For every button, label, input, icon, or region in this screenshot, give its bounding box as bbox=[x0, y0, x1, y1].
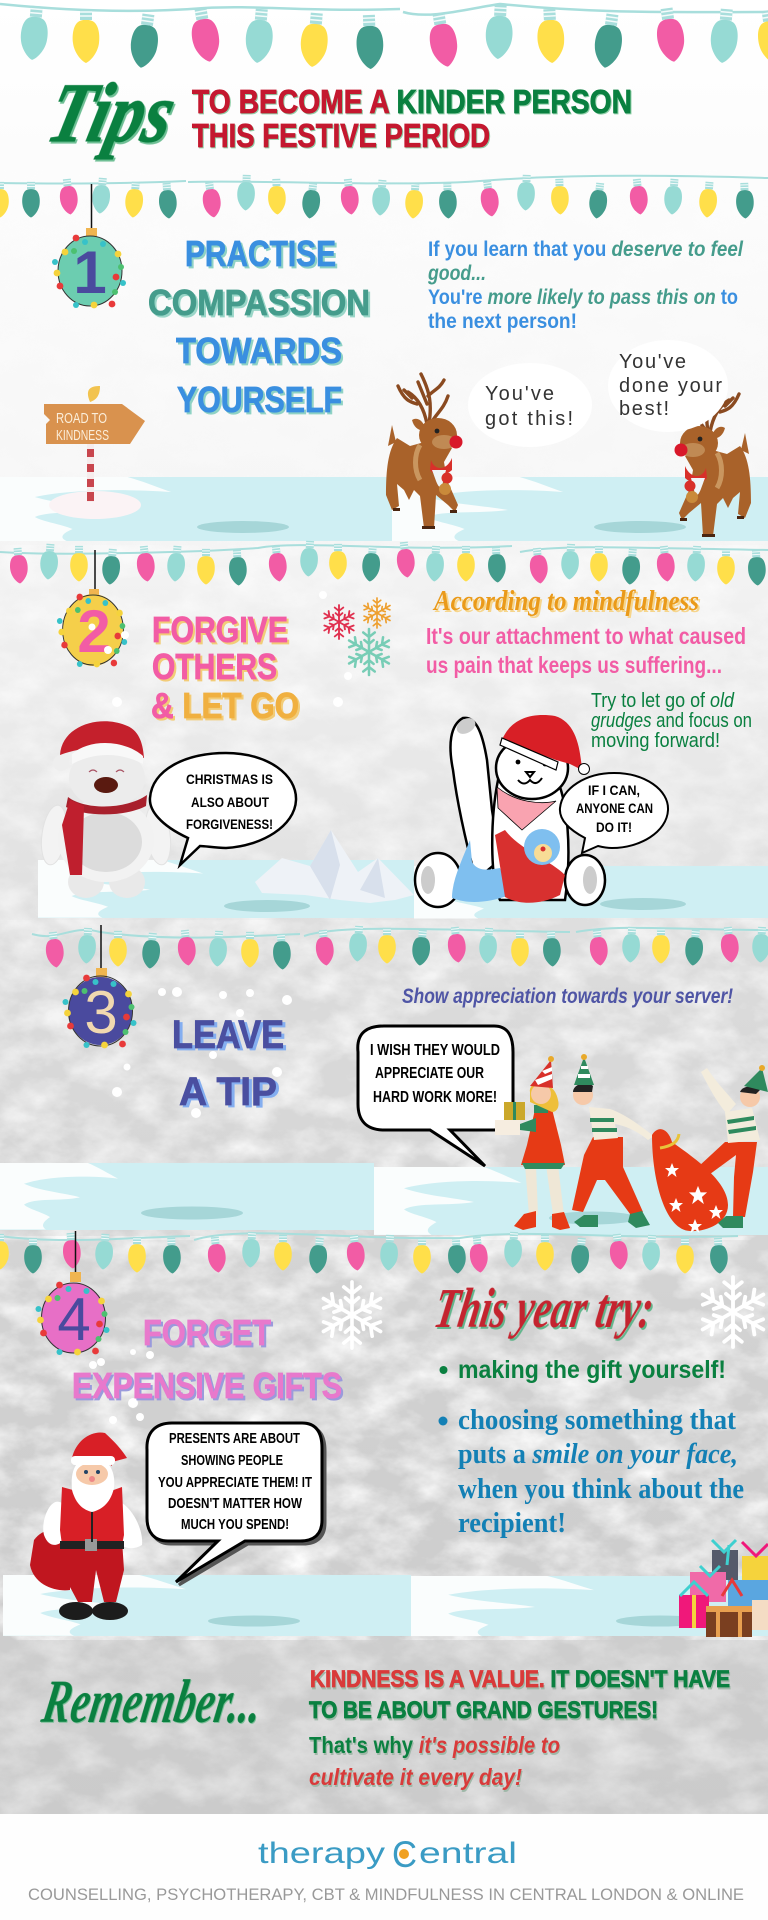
bubble text: IF I CAN, bbox=[588, 782, 640, 798]
elf carrying gifts bbox=[495, 1056, 570, 1230]
santa bbox=[30, 1432, 142, 1620]
speech bubble: I wish they would appreciate: HARD WORK MORE! bbox=[373, 1089, 497, 1106]
reindeer right bbox=[674, 382, 751, 537]
logo: therapy central: C bbox=[392, 1834, 417, 1875]
bubble text: PRESENTS ARE ABOUT bbox=[169, 1430, 300, 1447]
text block: deserve to feel good: If you learn that you deserve to feel bbox=[428, 238, 744, 261]
text block: deserve to feel good: the next person! bbox=[428, 310, 577, 333]
panel: ice ground section 3 bbox=[0, 1163, 768, 1235]
signpost: road to kindness bbox=[44, 386, 145, 519]
gift pile bbox=[679, 1540, 768, 1637]
reindeer left bbox=[386, 374, 462, 529]
speech cloud: you've done your best: best! bbox=[619, 398, 669, 420]
script word: remember: Remember... bbox=[37, 1666, 268, 1736]
speech cloud: you've done your best: done your bbox=[619, 375, 722, 397]
bubble text: I WISH THEY WOULD bbox=[370, 1042, 500, 1059]
footer tagline: COUNSELLING, PSYCHOTHERAPY, CBT & MINDFULNESS IN CENTRAL LONDON & ONLINE bbox=[28, 1885, 744, 1904]
text block: according to mindfulness bbox=[426, 586, 746, 678]
iceberg bbox=[255, 830, 414, 903]
ornament 3 bbox=[62, 925, 292, 1118]
logo: therapy central: therapy bbox=[258, 1837, 385, 1870]
ornament 2 bbox=[57, 550, 352, 707]
bullet: making the gift yourself: making the gift yourself! bbox=[458, 1356, 726, 1384]
script heading: According to mindfulness bbox=[432, 586, 699, 617]
title line 2: THIS FESTIVE PERIOD bbox=[192, 117, 490, 154]
speech cloud: you've done your best bbox=[608, 340, 728, 432]
heading: forgive others and let go: & LET GO bbox=[151, 685, 299, 726]
text block: this year try bbox=[430, 1278, 744, 1539]
logo: therapy central: entral bbox=[419, 1837, 517, 1870]
polar bear with scarf bbox=[38, 721, 174, 898]
heading: forgive others and let go: OTHERS bbox=[152, 646, 277, 687]
bullet: choosing something: choosing something that bbox=[458, 1404, 736, 1436]
panel: ice ground section 4 bbox=[3, 1575, 768, 1636]
heading: practise compassion towards yourself: PRACTISE bbox=[185, 233, 336, 274]
section: remember bbox=[37, 1666, 730, 1790]
callout line 3: That's why it's possible to bbox=[309, 1732, 560, 1758]
sack of presents bbox=[652, 1129, 728, 1233]
speech bubble: if I can anyone can do it: ANYONE CAN bbox=[576, 800, 653, 816]
panel: ice ground section 2 bbox=[38, 860, 768, 918]
speech bubble: christmas is also about forgiveness: FORGIVENESS! bbox=[186, 816, 273, 832]
heading: practise compassion towards yourself: COMPASSION bbox=[148, 282, 370, 323]
speech cloud: you've done your best: You've bbox=[619, 351, 686, 373]
string of lights: section 2 bbox=[0, 540, 768, 586]
heading: practise compassion towards yourself: YOURSELF bbox=[177, 379, 342, 420]
string of lights: section 1 bbox=[0, 175, 768, 219]
string of lights: top bbox=[0, 4, 768, 70]
bullet: choosing something: when you think about the bbox=[458, 1473, 744, 1505]
panel: ice ground section 1 bbox=[0, 477, 768, 541]
speech bubble: presents are about showing people: YOU APPRECIATE THEM! IT bbox=[158, 1474, 312, 1491]
ornament 1 bbox=[52, 184, 126, 308]
speech cloud: you've got this: got this! bbox=[485, 408, 573, 430]
signpost: road to kindness: KINDNESS bbox=[56, 427, 109, 444]
bullet: choosing something: puts a smile on your face, bbox=[458, 1438, 738, 1470]
speech cloud: you've got this bbox=[468, 363, 592, 447]
signpost: road to kindness: ROAD TO bbox=[56, 410, 107, 427]
ornament 1: 1 bbox=[73, 239, 107, 306]
speech bubble: presents are about showing people: MUCH YOU SPEND! bbox=[181, 1516, 289, 1533]
text block: let go of old grudges: moving forward! bbox=[591, 730, 720, 752]
elf with raised arm bbox=[698, 1065, 768, 1228]
elf pulling sack bbox=[572, 1054, 654, 1228]
bullet: choosing something: recipient! bbox=[458, 1507, 566, 1539]
heading: forget expensive gifts: EXPENSIVE GIFTS bbox=[72, 1365, 342, 1406]
speech bubble: presents are about showing people: DOESN'T MATTER HOW bbox=[168, 1495, 303, 1512]
speech bubble: if I can anyone can do it bbox=[560, 773, 668, 853]
speech bubble: christmas is also about forgiveness bbox=[150, 753, 296, 865]
ornament 2: 2 bbox=[77, 598, 111, 665]
title bbox=[39, 67, 632, 160]
ornament 4: 4 bbox=[57, 1286, 91, 1353]
ornament 4 bbox=[36, 1231, 154, 1424]
callout line 2: TO BE ABOUT GRAND GESTURES! bbox=[309, 1697, 658, 1724]
text block: deserve to feel good: You're more likely to pass this on to bbox=[428, 286, 738, 309]
speech cloud: you've got this: You've bbox=[485, 383, 554, 405]
heading: leave a tip bbox=[172, 1013, 284, 1114]
text block: deserve to feel good: good... bbox=[427, 262, 486, 285]
heading: practise compassion towards yourself: TOWARDS bbox=[176, 330, 342, 371]
heading: practise compassion towards yourself bbox=[148, 233, 370, 420]
text block: deserve to feel good bbox=[427, 238, 744, 333]
string of lights: section 3 bbox=[32, 925, 768, 970]
speech bubble: I wish they would appreciate bbox=[358, 1026, 513, 1166]
icon: white snowflakes bbox=[319, 1277, 768, 1348]
title script word: Tips: Tips bbox=[39, 67, 184, 160]
speech bubble: presents are about showing people: SHOWING PEOPLE bbox=[181, 1452, 283, 1469]
speech bubble: I wish they would appreciate: APPRECIATE OUR bbox=[375, 1065, 484, 1082]
heading: leave a tip: A TIP bbox=[179, 1070, 277, 1114]
speech bubble: presents are about showing people bbox=[147, 1423, 322, 1582]
polar bear with seal toy bbox=[415, 715, 605, 907]
heading: forget expensive gifts: FORGET bbox=[143, 1312, 271, 1353]
heading: forgive others and let go bbox=[151, 609, 299, 726]
text block: let go of old grudges bbox=[591, 690, 752, 752]
logo: therapy central bbox=[258, 1834, 517, 1875]
heading: forget expensive gifts bbox=[72, 1312, 342, 1406]
ornament 3: 3 bbox=[84, 979, 118, 1046]
text block: let go of old grudges: Try to let go of old bbox=[591, 690, 735, 712]
bullet: choosing something bbox=[438, 1404, 744, 1539]
speech bubble: if I can anyone can do it: DO IT! bbox=[596, 819, 632, 835]
script heading: This year try: bbox=[430, 1278, 659, 1340]
string of lights: section 4 bbox=[0, 1231, 738, 1274]
heading: leave a tip: LEAVE bbox=[172, 1013, 284, 1057]
callout line 4: cultivate it every day! bbox=[309, 1764, 522, 1790]
bubble text: CHRISTMAS IS bbox=[186, 771, 273, 787]
text block: let go of old grudges: grudges and focus on bbox=[591, 710, 752, 732]
callout line 1: KINDNESS IS A VALUE. IT DOESN'T HAVE bbox=[310, 1666, 730, 1693]
speech bubble: christmas is also about forgiveness: ALSO ABOUT bbox=[191, 794, 269, 810]
icon: snowflakes bbox=[322, 598, 392, 675]
heading: forgive others and let go: FORGIVE bbox=[152, 609, 288, 650]
title line 1: TO BECOME A KINDER PERSON bbox=[192, 83, 632, 120]
